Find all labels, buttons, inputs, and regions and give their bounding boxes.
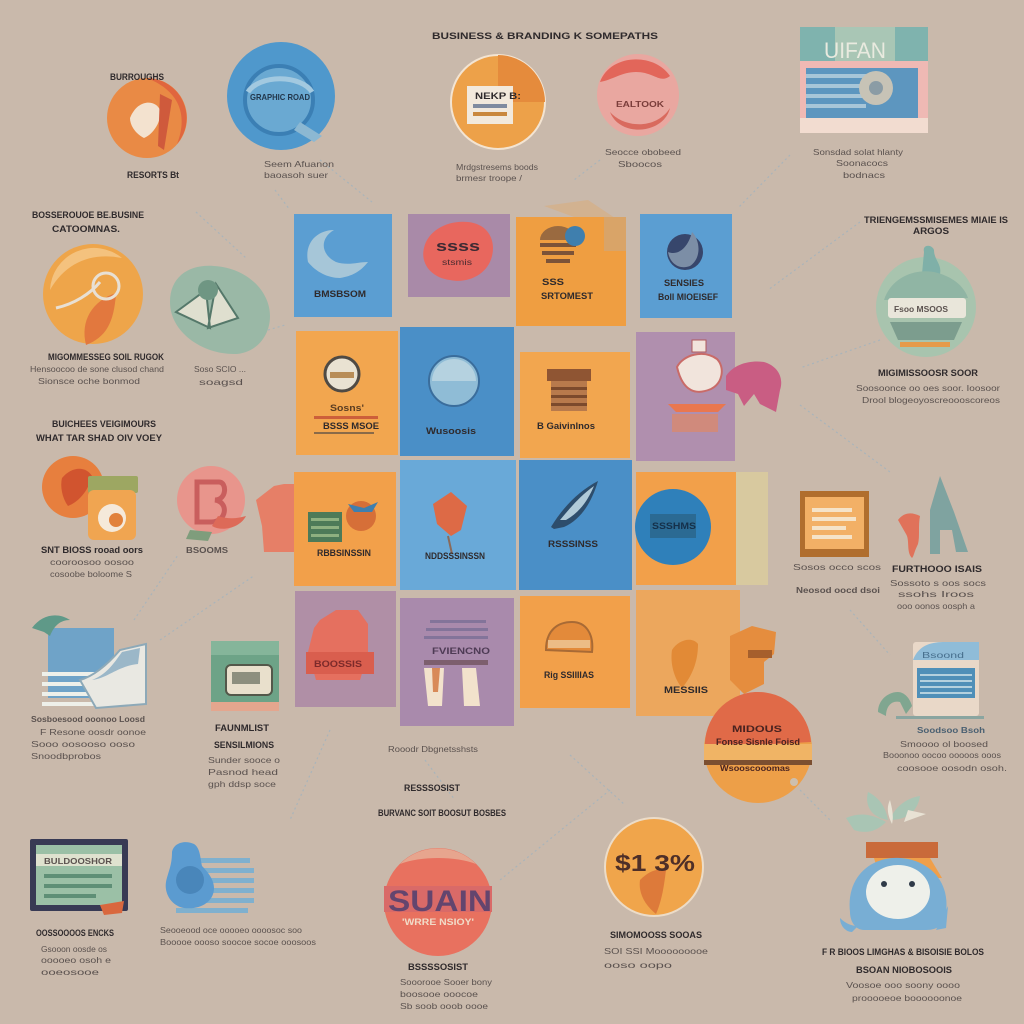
tile: orange helmet: Rig SSIIIIAS	[544, 670, 594, 681]
label: document fold	[31, 714, 146, 761]
heading: bottom centre: BURVANC SOIT BOOSUT BOSBES	[378, 808, 506, 819]
label: document fold: F Resone oosdr oonoe	[40, 727, 146, 737]
panel: right column icons	[704, 215, 1008, 932]
tile: orange helmet	[520, 596, 630, 708]
label: ticket card: Soonacocs	[836, 158, 888, 168]
label: coral circle big	[400, 962, 493, 1011]
tile: orange chest	[520, 352, 630, 458]
label: orange jar: SNT BIOSS rooad oors	[41, 545, 143, 556]
label: flower whale: BSOAN NIOBOSOOIS	[856, 965, 952, 976]
icon: orange jar	[42, 456, 138, 540]
icon: blue circle: GRAPHIC ROAD	[250, 92, 310, 102]
label: green box: SENSILMIONS	[214, 740, 274, 751]
label: blue panel: Booonoo oocoo ooooos ooos	[883, 750, 1001, 760]
label: green bow	[194, 364, 246, 387]
tile: blue orb: SENSIES	[664, 278, 704, 289]
icon: orange key circle	[43, 244, 143, 345]
icon: ticket card	[800, 27, 928, 133]
icon: green bow shape	[170, 266, 270, 354]
label: orange window	[793, 562, 881, 595]
tile: orange stack: SRTOMEST	[541, 291, 593, 302]
icon: orange oval badge: Fonse Sisnle Foisd	[716, 737, 800, 748]
label: blue panel: coosooe oosodn osoh.	[897, 763, 1007, 773]
label: blue panel: Smoooo ol boosed	[900, 739, 988, 749]
tile: orange magnifier: Sosns'	[330, 403, 364, 414]
tile: blue quill	[519, 460, 632, 590]
heading: left middle	[36, 419, 163, 444]
tile: purple gem	[295, 591, 396, 707]
heading: right upper: ARGOS	[913, 226, 949, 237]
connector lines	[134, 155, 890, 880]
tile: purple columns: FVIENCNO	[432, 646, 490, 657]
icon: coral arrow tab	[256, 484, 296, 552]
icon: percent circle: $1 3%	[615, 850, 695, 876]
label: green box: Sunder sooce o	[208, 755, 280, 765]
tile: orange figure: MESSIIS	[664, 685, 708, 696]
tile: light blue pin: NDDSSSINSSN	[425, 551, 485, 562]
label: coral circle: Seocce obobeed	[605, 147, 681, 157]
icon: orange oval badge: Wsooscooomas	[720, 763, 790, 773]
icon: orange circle	[107, 78, 187, 158]
label: blue figure	[160, 925, 316, 947]
label: orange circle: BURROUGHS	[110, 72, 164, 83]
label: ticket card: bodnacs	[843, 170, 885, 180]
label: orange badge circle	[456, 162, 538, 183]
tile: purple columns	[400, 598, 514, 726]
tile: orange stack	[516, 200, 626, 326]
label: blue circle: Seem Afuanon	[264, 159, 334, 169]
label: sail shapes: Sossoto s oos socs	[890, 578, 986, 588]
label: orange circle	[110, 72, 180, 181]
label: green box: Pasnod head	[208, 767, 278, 777]
tile: orange chest: B Gaivinlnos	[537, 421, 595, 432]
label: blue figure: Booooe oooso soocoe socoe ooosoos	[160, 937, 316, 947]
icon: pink circle: BSOOMS	[186, 545, 228, 555]
tile: orange lime: RBBSINSSIN	[317, 548, 371, 559]
icon: coral circle big: SUAIN	[388, 885, 492, 918]
icon: monitor	[30, 839, 128, 915]
label: percent circle: SIMOMOOSS SOOAS	[610, 930, 702, 941]
icon: blue circle	[227, 42, 335, 150]
icon: percent circle	[605, 818, 703, 916]
title: BUSINESS & BRANDING K SOMEPATHS	[432, 31, 658, 42]
tile: purple badge: ssss	[436, 238, 480, 255]
tile: purple gem: BOOSSIS	[314, 659, 362, 670]
tile: light blue pin	[400, 460, 516, 590]
label: blue circle	[264, 159, 334, 180]
label: flower whale: prooooeoe boooooonoe	[852, 993, 962, 1003]
label: orange badge circle: Mrdgstresems boods	[456, 162, 538, 172]
tile: orange blue disc: SSSHMS	[652, 521, 696, 532]
tile: blue orb	[640, 214, 732, 318]
icon: ticket card: UIFAN	[824, 38, 886, 63]
icon: green cloche	[876, 246, 976, 357]
label: blue panel	[883, 725, 1007, 773]
label: green box: FAUNMLIST	[215, 723, 269, 734]
heading: right upper: TRIENGEMSSMISEMES MIAIE IS	[864, 215, 1008, 226]
panel: lower labels	[30, 744, 984, 1011]
label: coral circle big: BSSSSOSIST	[408, 962, 468, 973]
label: monitor	[36, 928, 114, 977]
icon: orange oval badge: MIDOUS	[732, 724, 782, 735]
icon: pink circle	[177, 466, 246, 555]
heading: left upper: BOSSEROUOE BE.BUSINE	[32, 210, 144, 221]
label: green bow: Soso SCIO ...	[194, 364, 246, 374]
label: orange key: MIGOMMESSEG SOIL RUGOK	[48, 352, 164, 363]
tile: orange figure	[636, 590, 776, 716]
label: flower whale: Voosoe ooo soony oooo	[846, 980, 960, 990]
label: monitor: ooooeo osoh e	[41, 955, 111, 965]
icon: coral circle big	[384, 848, 492, 956]
label: green cloche: MIGIMISSOOSR SOOR	[878, 368, 978, 379]
label: sail shapes: ssohs Iroos	[898, 589, 974, 599]
label: coral circle	[605, 147, 681, 169]
tile: purple teapot	[636, 332, 781, 461]
label: document fold: Snoodbprobos	[31, 751, 101, 761]
label: coral circle: Sboocos	[618, 159, 662, 169]
label: green cloche: Soosoonce oo oes soor. Ioosoor	[856, 383, 1000, 393]
label: percent circle	[604, 930, 708, 970]
tile: orange stack: SSS	[542, 277, 564, 288]
heading: right upper	[864, 215, 1008, 237]
icon: coral circle: EALTOOK	[616, 99, 665, 109]
heading: left middle: WHAT TAR SHAD OIV VOEY	[36, 433, 163, 444]
icon: sail shapes	[898, 476, 968, 558]
label: monitor: Gsooon oosde os	[41, 944, 107, 954]
label: orange key	[30, 352, 164, 386]
panel: left column icons	[30, 210, 296, 789]
label: green bow: soagsd	[199, 377, 243, 387]
label: blue circle: baoasoh suer	[264, 170, 328, 180]
icon: blue panel	[878, 642, 984, 719]
tile: purple badge	[408, 214, 510, 297]
label: document fold: Sosboesood ooonoo Loosd	[31, 714, 145, 724]
icon: orange oval badge	[704, 692, 812, 803]
label: green box	[208, 723, 280, 789]
icon: flower whale	[840, 792, 948, 932]
label: sail shapes	[890, 564, 986, 611]
tile: orange blue disc	[635, 472, 768, 585]
heading: bottom centre	[378, 783, 506, 819]
label: flower whale: F R BIOOS LIMGHAS & BISOISIE BOLOS	[822, 947, 984, 958]
caption: under grid: Rooodr Dbgnetsshsts	[388, 744, 478, 754]
label: orange window: Sosos occo scos	[793, 562, 881, 572]
label: ticket card: Sonsdad solat hlanty	[813, 147, 904, 157]
label: percent circle: ooso oopo	[604, 960, 672, 970]
panel: central tile grid	[294, 200, 781, 726]
label: document fold: Sooo oosooso ooso	[31, 739, 135, 749]
label: green cloche: Drool blogeoyoscreoooscoreos	[862, 395, 1000, 405]
icon: green cloche: Fsoo MSOOS	[894, 304, 948, 314]
label: coral circle big: Sb soob ooob oooe	[400, 1001, 488, 1011]
icon: green box	[211, 641, 279, 711]
tile: blue lens	[400, 327, 514, 456]
label: orange jar: cosoobe boloome S	[50, 569, 132, 579]
label: sail shapes: FURTHOOO ISAIS	[892, 564, 982, 575]
icon: blue figure	[166, 842, 254, 913]
label: orange badge circle: brmesr troope /	[456, 173, 523, 183]
icon: document fold	[32, 615, 146, 708]
tile: orange magnifier: BSSS MSOE	[323, 421, 379, 432]
tile: orange magnifier	[296, 331, 398, 455]
label: monitor: ooeosooe	[41, 967, 99, 977]
label: coral circle big: Sooorooe Sooer bony	[400, 977, 493, 987]
heading: bottom centre: RESSSOSIST	[404, 783, 460, 794]
tile: blue shell: BMSBSOM	[314, 289, 366, 300]
tile: blue lens: Wusoosis	[426, 426, 476, 437]
tile: blue quill: RSSSINSS	[548, 539, 598, 550]
label: coral circle big: boosooe ooocoe	[400, 989, 478, 999]
icon: blue panel: Bsoond	[922, 650, 964, 660]
label: orange key: Sionsce oche bonmod	[38, 376, 140, 386]
icon: monitor: BULDOOSHOR	[44, 856, 112, 866]
label: green cloche	[856, 368, 1000, 405]
label: orange jar	[41, 545, 143, 579]
icon: orange window	[800, 491, 869, 557]
label: orange key: Hensoocoo de sone clusod chand	[30, 364, 164, 374]
label: orange window: Neosod oocd dsoi	[796, 585, 880, 595]
heading: left upper: CATOOMNAS.	[52, 224, 120, 235]
icon: orange badge circle: NEKP B:	[475, 91, 521, 102]
label: green box: gph ddsp soce	[208, 779, 276, 789]
label: orange jar: cooroosoo oosoo	[50, 557, 134, 567]
label: blue figure: Seooeood oce ooooeo oooosoc soo	[160, 925, 302, 935]
heading: left middle: BUICHEES VEIGIMOURS	[52, 419, 156, 430]
tile: blue orb: Boll MlOEISEF	[658, 292, 718, 303]
tile: orange lime	[294, 472, 396, 586]
label: flower whale	[822, 947, 984, 1003]
icon: orange badge circle	[451, 55, 545, 149]
icon: coral circle big: 'WRRE NSIOY'	[402, 917, 474, 928]
tile: purple badge: stsmis	[442, 257, 472, 267]
label: orange circle: RESORTS Bt	[127, 170, 180, 181]
label: monitor: OOSSOOOOS ENCKS	[36, 928, 114, 939]
panel: top icons	[107, 27, 928, 183]
label: blue panel: Soodsoo Bsoh	[917, 725, 985, 735]
label: sail shapes: ooo oonos oosph a	[897, 601, 975, 611]
heading: left upper	[32, 210, 144, 235]
label: ticket card	[813, 147, 904, 180]
label: percent circle: SOI SSI Mooooooooe	[604, 946, 708, 956]
icon: coral circle	[597, 54, 679, 136]
tile: blue shell	[294, 214, 392, 317]
